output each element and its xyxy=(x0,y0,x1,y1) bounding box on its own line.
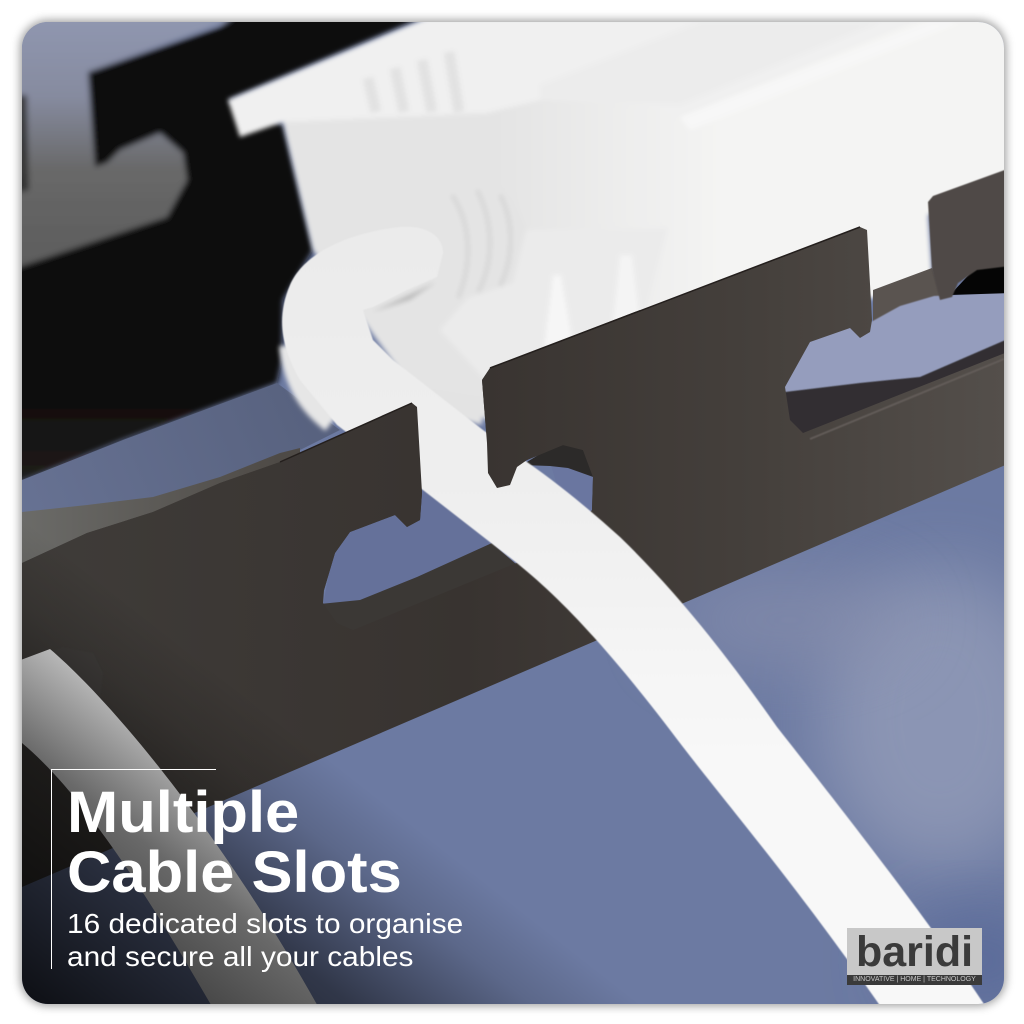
title: Cable Slots xyxy=(67,840,402,905)
subtitle: and secure all your cables xyxy=(67,941,413,972)
rear tray, blurred xyxy=(22,22,418,480)
front metal bar xyxy=(22,227,1010,887)
subtitle: 16 dedicated slots to organise xyxy=(67,908,463,939)
left slot window xyxy=(324,490,516,630)
far right tab xyxy=(928,168,1010,300)
logo tagline: INNOVATIVE | HOME | TECHNOLOGY xyxy=(853,976,976,983)
title xyxy=(67,780,402,905)
tab top edge lines xyxy=(280,227,860,462)
rule: callout frame left xyxy=(51,769,52,969)
centre slot window xyxy=(526,445,593,477)
blue floor behind front bar xyxy=(22,383,340,512)
title: Multiple xyxy=(67,780,299,845)
left foreground cable xyxy=(10,649,320,1010)
bottom-left bar slot xyxy=(40,647,103,700)
power strip, blurred xyxy=(228,18,1020,425)
logo tagline xyxy=(847,975,982,985)
right slot window xyxy=(780,262,1010,438)
bottom-left readability gradient xyxy=(22,595,603,1004)
bar lip highlight xyxy=(810,359,1004,439)
front bar back lip xyxy=(22,448,300,570)
left tab over cable xyxy=(22,403,422,590)
main white cable xyxy=(282,227,988,1010)
logo: baridi xyxy=(847,928,982,985)
centre tab over cable xyxy=(482,310,640,510)
logo wordmark: baridi xyxy=(856,928,973,976)
rule: callout frame top xyxy=(51,769,216,770)
subtitle xyxy=(67,908,463,972)
plug boot xyxy=(454,194,515,293)
